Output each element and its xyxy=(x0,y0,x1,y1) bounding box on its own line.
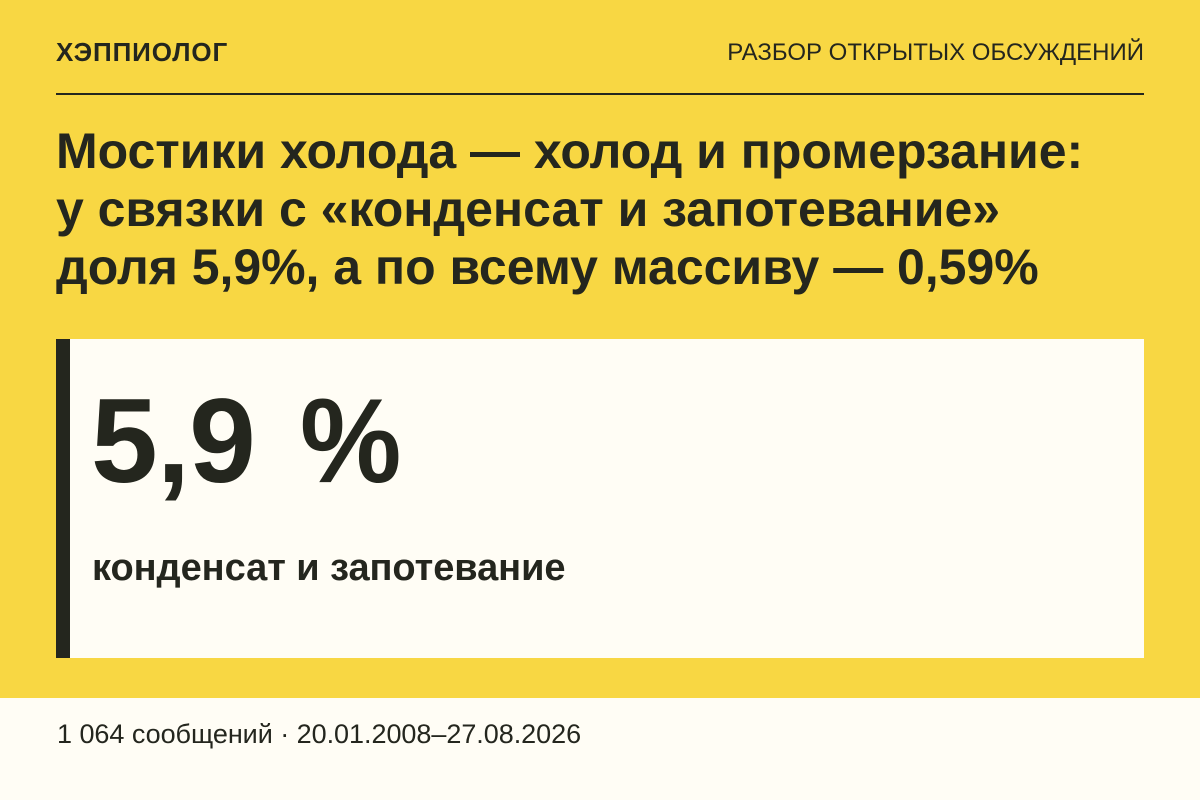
section label: РАЗБОР ОТКРЫТЫХ ОБСУЖДЕНИЙ xyxy=(727,39,1144,66)
footer text: 1 064 сообщений · 20.01.2008–27.08.2026 xyxy=(57,719,581,749)
header rule xyxy=(56,93,1144,95)
title xyxy=(56,123,1083,295)
big number xyxy=(91,374,401,508)
big number: 5,9 xyxy=(91,374,255,508)
title: Мостики холода — холод и промерзание: xyxy=(56,123,1083,179)
title: доля 5,9%, а по всему массиву — 0,59% xyxy=(56,239,1039,295)
panel: key figure xyxy=(56,339,1144,658)
big number: % xyxy=(300,374,401,508)
figure caption: конденсат и запотевание xyxy=(92,547,565,589)
brand label: ХЭППИОЛОГ xyxy=(56,37,228,67)
footer band xyxy=(0,698,1200,800)
title: у связки с «конденсат и запотевание» xyxy=(56,181,1000,237)
panel accent bar xyxy=(56,339,70,658)
